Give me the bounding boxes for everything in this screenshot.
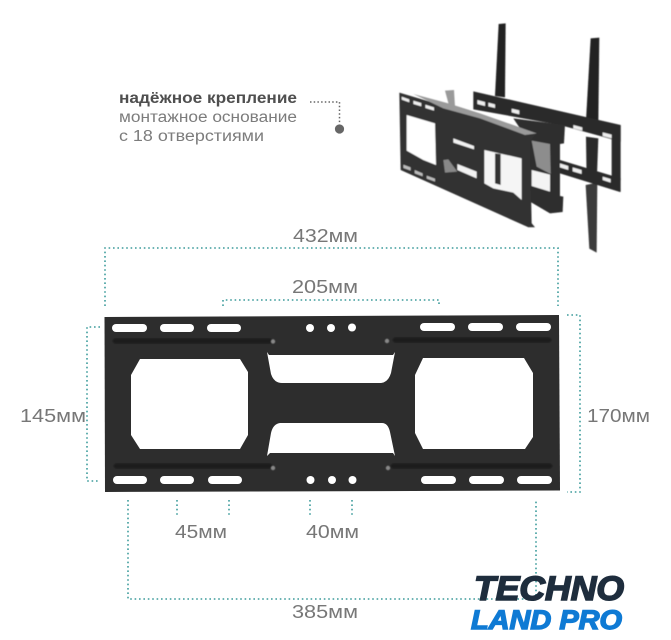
centre holes xyxy=(306,324,356,484)
dimension: 170 mm xyxy=(567,315,650,492)
callout: reliable mounting text xyxy=(119,90,297,145)
logo: Techno Land Pro: TECHNO xyxy=(474,570,624,608)
mounting slots xyxy=(112,323,552,484)
back bracket xyxy=(473,23,621,253)
logo: Techno Land Pro: LAND PRO xyxy=(471,605,622,635)
swing arm xyxy=(513,118,565,213)
dimension: 40 mm xyxy=(306,500,359,542)
dimension: 205 mm xyxy=(223,277,439,306)
dimension: 45 mm: 45мм xyxy=(175,522,227,542)
product photo: articulated TV wall mount xyxy=(399,23,621,253)
callout: reliable mounting text: с 18 отверстиями xyxy=(119,128,264,145)
dimension: 432 mm xyxy=(105,226,558,306)
dimension: 205 mm: 205мм xyxy=(292,277,358,297)
mounting plate xyxy=(104,315,560,492)
dimension: 432 mm: 432мм xyxy=(293,226,358,246)
rivets xyxy=(271,339,390,470)
front plate xyxy=(399,90,537,227)
dimension: 145 mm: 145мм xyxy=(20,406,86,426)
dimension: 385 mm xyxy=(128,500,536,622)
plate openings xyxy=(131,352,533,456)
callout: reliable mounting text: монтажное основание xyxy=(119,109,297,126)
dimension: 145 mm xyxy=(20,327,100,481)
dimension: 40 mm: 40мм xyxy=(306,522,359,542)
callout leader line with dot xyxy=(310,102,344,134)
callout: reliable mounting text: надёжное крепление xyxy=(119,90,297,107)
dimension: 170 mm: 170мм xyxy=(587,406,650,426)
logo: Techno Land Pro xyxy=(471,570,624,635)
dimension: 45 mm xyxy=(175,500,229,542)
stiffening ribs xyxy=(115,340,550,466)
dimension: 385 mm: 385мм xyxy=(292,602,358,622)
